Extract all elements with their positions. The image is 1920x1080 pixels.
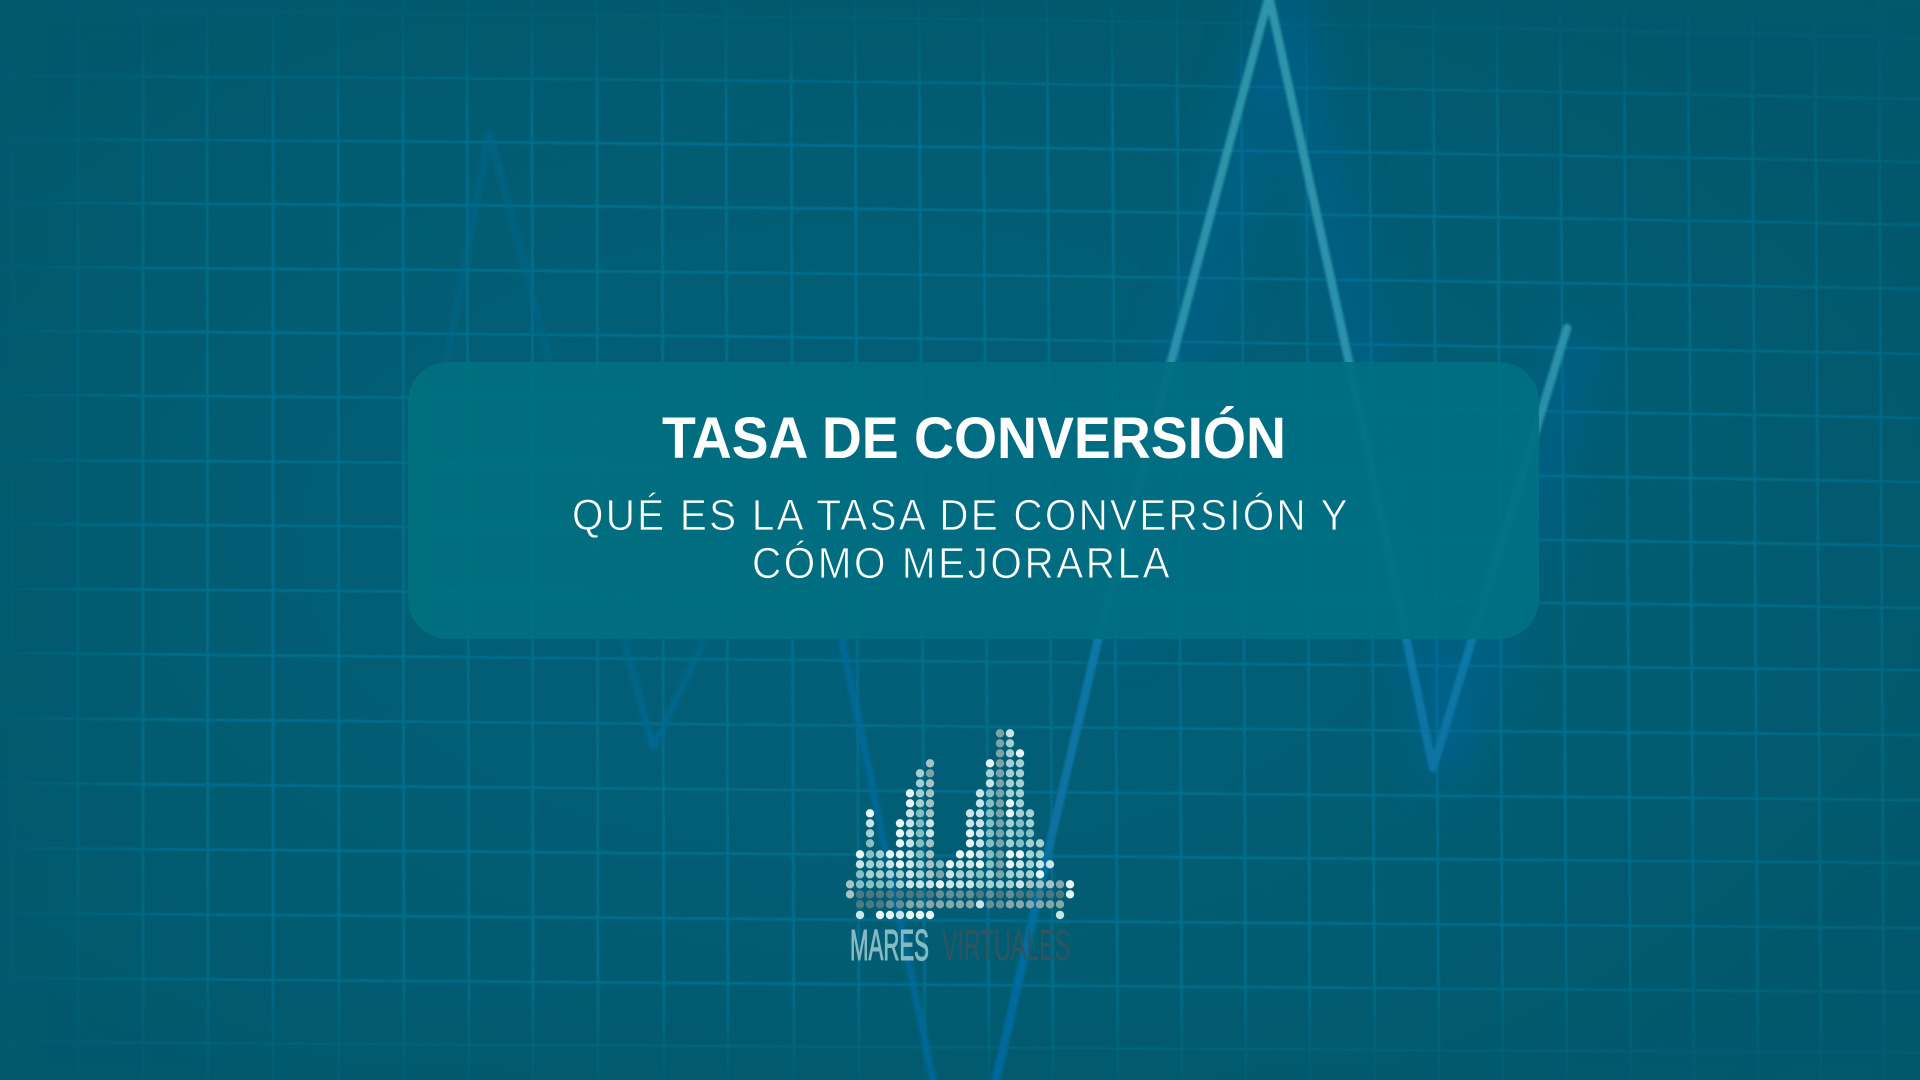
panel: title card	[408, 362, 1539, 639]
icon: Mares Virtuales dotted logo	[846, 729, 1074, 970]
logo wordmark: VIRTUALES: VIRTUALES	[942, 922, 1070, 970]
subtitle line 2: CÓMO MEJORARLA	[752, 539, 1170, 587]
chart line: bright right section	[990, 0, 1567, 1080]
subtitle line 1: QUÉ ES LA TASA DE CONVERSIÓN Y	[572, 491, 1348, 539]
chart line: faint down stroke	[799, 438, 934, 1080]
chart line: faint left section	[447, 133, 799, 748]
logo wordmark: MARES: MARES	[850, 922, 929, 970]
chart line: blue glow	[1114, 0, 1581, 768]
title: TASA DE CONVERSIÓN	[662, 406, 1286, 471]
logo dots	[846, 729, 1074, 919]
